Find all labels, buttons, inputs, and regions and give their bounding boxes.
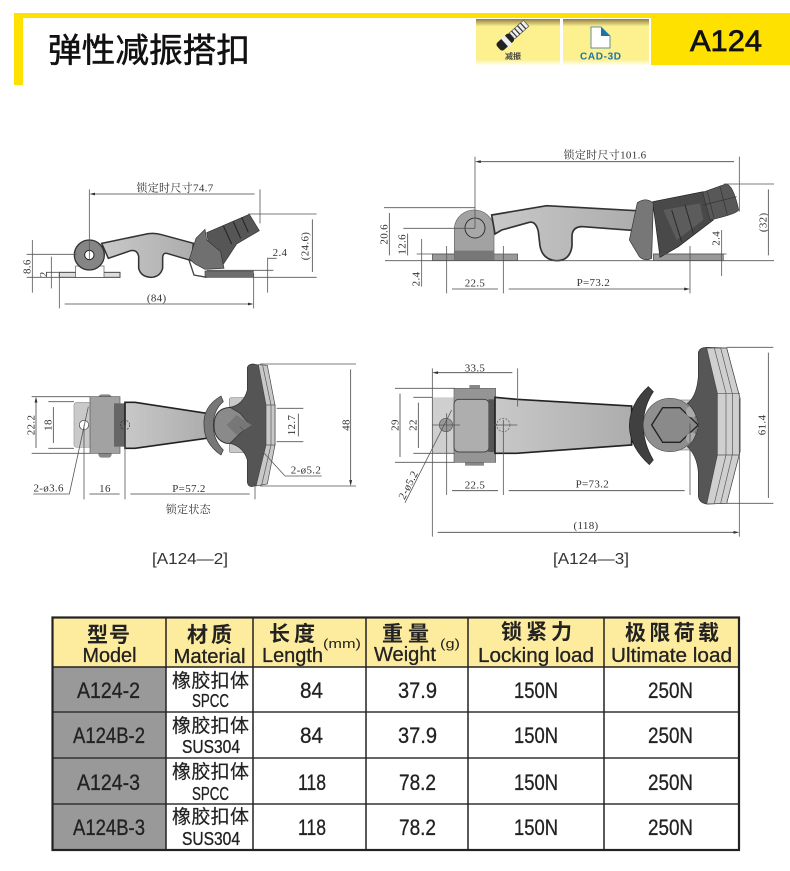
dimensions: 22.5 [465, 278, 485, 290]
table header: 重量 [382, 623, 429, 646]
table row: A124B-2: A124B-2 [73, 723, 145, 748]
table header: (mm) [323, 636, 361, 651]
specification table [52, 617, 739, 850]
table row: A124B-2 [73, 715, 693, 757]
table header: 材质 [187, 624, 232, 647]
table header: 锁紧力 [501, 621, 572, 644]
table row: A124B-2: 250N [648, 723, 693, 748]
table row: A124B-2: 84 [300, 723, 323, 748]
dimensions: 16 [99, 483, 111, 495]
latch body side view [59, 214, 259, 277]
table row: A124B-2: 37.9 [398, 723, 437, 748]
dimensions: 2-ø3.6 [33, 482, 64, 494]
table row: A124-3: 78.2 [399, 770, 436, 795]
dimensions: 2 [38, 271, 50, 277]
dimensions: 2-ø5.2 [397, 469, 421, 501]
title: 弹性减振搭扣 [48, 23, 250, 72]
badge: vibration damping [476, 19, 560, 65]
dimensions: 20.6 [379, 224, 391, 245]
table row: A124B-3: 250N [648, 815, 693, 840]
dimensions: 29 [390, 419, 402, 431]
table row: A124-3: 橡胶扣体 [172, 761, 249, 783]
table row: A124-2 [77, 670, 693, 711]
dimensions: 12.7 [286, 415, 298, 435]
dimensions: 22.5 [465, 480, 485, 492]
table row: A124-2: 150N [514, 678, 558, 703]
table header: 极限荷载 [625, 622, 719, 645]
table row: A124-3: 250N [648, 770, 693, 795]
table row: A124-2: 250N [648, 678, 693, 703]
table row: A124-3: SPCC [192, 784, 229, 804]
dimensions: 2.4 [273, 247, 288, 259]
table header: Ultimate load [611, 645, 732, 667]
badge: vibration damping: 减振 [505, 51, 521, 61]
drawing: A124-3 top view [390, 347, 773, 537]
dimensions: 2.4 [710, 231, 722, 246]
dimensions: 锁定时尺寸101.6 [564, 148, 647, 162]
table header: Length [262, 645, 323, 667]
dimensions: 2-ø5.2 [291, 465, 321, 477]
badge: CAD-3D: CAD-3D [580, 52, 621, 62]
table header: (g) [440, 636, 460, 651]
dimensions [22, 180, 317, 308]
latch body top view [432, 347, 740, 504]
table row: A124B-3 [73, 806, 693, 849]
latch body side view [432, 184, 739, 261]
dimensions [26, 364, 356, 516]
table row: A124-3: 150N [514, 770, 558, 795]
dimensions: 锁定状态 [166, 502, 212, 516]
table row: A124B-3: 150N [514, 815, 558, 840]
model code: A124 [690, 25, 762, 58]
header band [14, 13, 790, 85]
drawing: A124-3 side view [379, 148, 774, 293]
table row: A124B-3: 118 [298, 815, 326, 840]
dimensions: 22 [407, 419, 419, 431]
table row: A124B-2: 150N [514, 723, 558, 748]
dimensions: 2.4 [411, 271, 423, 286]
table row: A124B-2: SUS304 [182, 737, 240, 757]
dimensions: 33.5 [465, 363, 485, 375]
dimensions: (24.6) [300, 232, 312, 260]
dimensions: 48 [340, 419, 352, 431]
table header [82, 621, 732, 668]
icon: spring damper [495, 19, 530, 53]
dimensions: 61.4 [757, 415, 769, 435]
table header: Locking load [478, 645, 594, 667]
table row: A124B-2: 橡胶扣体 [172, 715, 249, 737]
table row: A124-2: 37.9 [398, 678, 437, 703]
table row: A124B-3: 橡胶扣体 [172, 806, 249, 828]
dimensions: 12.6 [397, 234, 409, 255]
dimensions: 22.2 [26, 415, 38, 435]
drawing: A124-2 side view [22, 180, 317, 308]
dimensions: (118) [573, 520, 599, 532]
icon: document [591, 27, 610, 48]
badge: CAD-3D [563, 19, 649, 65]
table header: Model [82, 645, 136, 667]
table row: A124-2: SPCC [192, 691, 229, 711]
table row: A124-2: 84 [300, 678, 323, 703]
caption: A124-3: [A124—3] [553, 551, 629, 568]
dimensions: (84) [147, 292, 166, 304]
dimensions [390, 347, 773, 537]
dimensions: 18 [43, 419, 55, 431]
caption: A124-2: [A124—2] [152, 551, 228, 568]
table row: A124-2: A124-2 [77, 678, 140, 703]
table header: Weight [374, 644, 436, 666]
dimensions: P=57.2 [172, 483, 206, 495]
table header: Material [174, 646, 246, 668]
dimensions: 8.6 [22, 259, 34, 274]
table header: 型号 [87, 624, 130, 647]
dimensions: 锁定时尺寸74.7 [136, 180, 214, 194]
table row: A124-3: 118 [298, 770, 326, 795]
dimensions: P=73.2 [576, 478, 609, 490]
drawing: A124-2 top view [26, 364, 356, 516]
table header: 长度 [269, 623, 315, 646]
latch body top view [74, 364, 275, 487]
dimensions [379, 148, 774, 293]
table row: A124-2: 橡胶扣体 [172, 670, 249, 692]
dimensions: (32) [757, 213, 769, 232]
table row: A124B-3: A124B-3 [73, 815, 145, 840]
table row: A124-3: A124-3 [77, 770, 140, 795]
table row: A124B-3: 78.2 [399, 815, 436, 840]
table row: A124B-3: SUS304 [182, 829, 240, 849]
table row: A124-3 [77, 761, 693, 804]
dimensions: P=73.2 [577, 277, 610, 289]
